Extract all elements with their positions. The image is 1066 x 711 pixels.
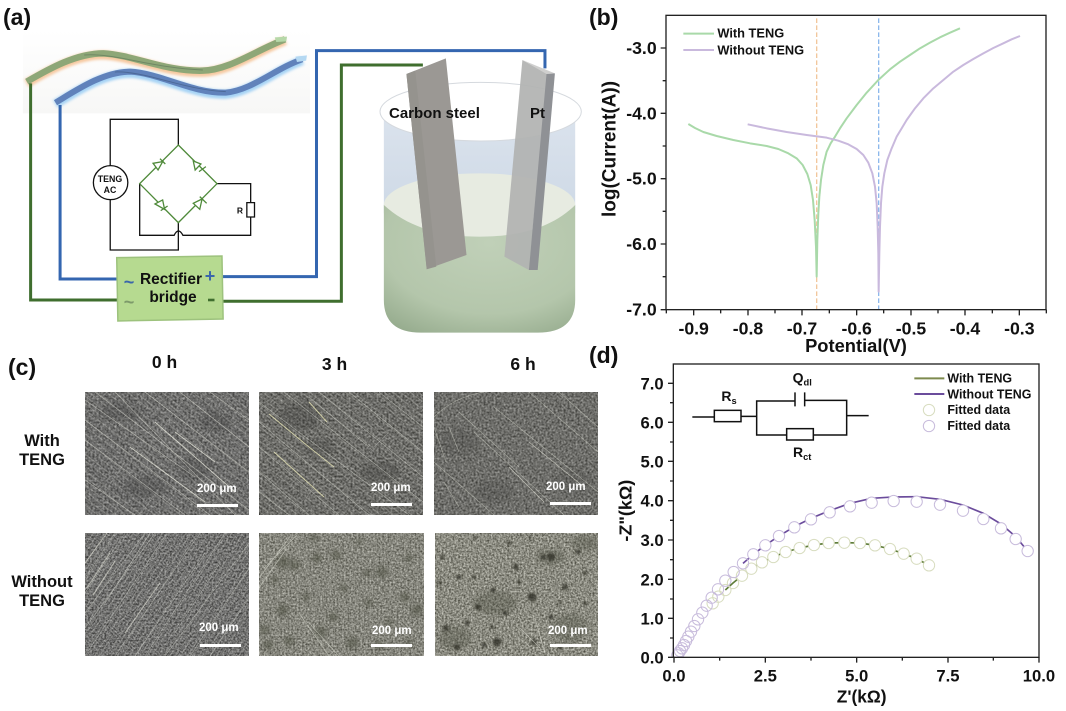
label: TENG AC: TENG <box>98 174 122 184</box>
y tick labels: 5.0 <box>641 452 664 471</box>
y tick labels <box>626 38 657 319</box>
scale bars: 200 μm <box>199 622 239 634</box>
TENG ribbons <box>23 30 310 113</box>
schematic drawing <box>23 30 581 333</box>
electrode: carbon steel <box>406 58 467 269</box>
x axis title: Z'(kΩ) <box>837 686 887 706</box>
y axis title: -Z"(kΩ) <box>616 480 636 542</box>
curve: without TENG <box>743 497 1028 563</box>
y tick labels: -4.0 <box>626 103 657 123</box>
x tick labels <box>662 667 1055 686</box>
equivalent circuit inset: ct <box>803 452 811 462</box>
label: carbon steel: Carbon steel <box>389 105 480 122</box>
scale bars: 200 μm <box>546 481 586 493</box>
column headers <box>152 352 536 374</box>
fitted circles: with TENG <box>707 537 935 609</box>
micrograph: with TENG 3 h <box>259 392 423 515</box>
x tick labels: -0.6 <box>841 318 872 338</box>
beaker <box>380 82 581 333</box>
x tick labels: 2.5 <box>754 667 777 686</box>
label: rectifier bridge <box>140 271 202 306</box>
column headers: 3 h <box>322 354 347 374</box>
y tick labels: -6.0 <box>626 234 657 254</box>
legend: Fitted data <box>947 419 1010 433</box>
legend: Without TENG <box>717 42 804 57</box>
x axis title: Potential(V) <box>805 335 907 356</box>
scale bars: 200 μm <box>371 482 411 494</box>
panel: (a) TENG circuit and beaker <box>3 4 581 333</box>
legend <box>683 26 804 57</box>
scale bars: 200 μm <box>197 483 237 495</box>
y tick labels: -3.0 <box>626 38 657 58</box>
y tick labels: 0.0 <box>641 648 664 667</box>
legend <box>914 372 1031 433</box>
rectifier bridge box <box>117 256 223 321</box>
y tick labels <box>641 374 664 667</box>
row label: with TENG <box>19 432 65 469</box>
equivalent circuit inset: s <box>731 396 737 406</box>
row label: with TENG: With <box>24 432 60 450</box>
rectifier terminals: + <box>205 266 215 286</box>
micrograph: without TENG 0 h <box>85 533 249 656</box>
electrode: Pt <box>504 60 555 270</box>
curve: without TENG <box>748 36 1020 292</box>
x tick labels: -0.3 <box>1004 318 1035 338</box>
label: TENG AC <box>98 174 122 195</box>
micrograph: with TENG 0 h <box>85 392 249 515</box>
white mask below axis <box>667 658 707 663</box>
label: TENG AC: AC <box>104 185 117 195</box>
rectifier terminals: ~ <box>124 292 134 312</box>
label: (d): (d) <box>589 342 618 368</box>
y tick labels: 4.0 <box>641 492 664 511</box>
curve: with TENG <box>725 543 929 590</box>
label: (c): (c) <box>8 354 36 380</box>
chart: Tafel plot <box>600 15 1046 356</box>
rectifier terminals: ~ <box>124 272 134 292</box>
row label: without TENG: Without <box>11 573 73 591</box>
y tick labels: -7.0 <box>626 299 657 319</box>
scale bars: 200 μm <box>372 625 412 637</box>
reference dashes <box>817 18 879 310</box>
x tick labels: -0.7 <box>787 318 817 338</box>
panel: (b) polarization curves <box>589 4 1046 356</box>
legend: With TENG <box>717 26 784 41</box>
axes <box>668 364 1039 663</box>
y axis title: log(Current(A)) <box>600 81 621 217</box>
micrograph: without TENG 6 h <box>435 533 598 656</box>
label: Pt: Pt <box>530 105 545 122</box>
scale bars <box>197 481 591 647</box>
y tick labels: 3.0 <box>641 531 664 550</box>
equivalent circuit inset <box>692 370 869 462</box>
row label: with TENG: TENG <box>19 451 65 469</box>
rectifier terminals <box>124 266 215 312</box>
label: (b): (b) <box>589 4 618 30</box>
micrograph: with TENG 6 h <box>434 392 598 515</box>
y tick labels: 6.0 <box>641 413 664 432</box>
panel: (d) Nyquist plot <box>589 342 1055 706</box>
column headers: 6 h <box>510 354 536 374</box>
label: rectifier bridge: bridge <box>149 289 197 306</box>
wires <box>31 51 545 301</box>
x tick labels: 5.0 <box>845 667 868 686</box>
label: rectifier bridge: Rectifier <box>140 271 202 288</box>
x tick labels: -0.9 <box>678 318 709 338</box>
panel: (c) micrographs <box>8 352 599 656</box>
equivalent circuit inset: R <box>721 388 731 404</box>
x tick labels: 10.0 <box>1023 667 1055 686</box>
fitted circles: without TENG <box>672 495 1033 661</box>
chart: impedance <box>616 364 1055 706</box>
bridge circuit <box>93 119 254 250</box>
x tick labels: -0.5 <box>896 318 926 338</box>
scale bars: 200 μm <box>548 625 588 637</box>
label: (a): (a) <box>3 4 31 30</box>
x tick labels: 7.5 <box>936 667 960 686</box>
y tick labels: 7.0 <box>641 374 664 393</box>
x tick labels: 0.0 <box>662 667 686 686</box>
x tick labels <box>678 318 1035 338</box>
legend: Without TENG <box>947 387 1031 401</box>
y tick labels: 1.0 <box>641 609 664 628</box>
y tick labels: -5.0 <box>626 169 657 189</box>
equivalent circuit inset: Q <box>793 370 804 386</box>
legend: Fitted data <box>947 403 1010 417</box>
x tick labels: -0.8 <box>733 318 763 338</box>
curve: with TENG <box>688 28 960 277</box>
row label: without TENG <box>11 573 73 610</box>
label: R: R <box>237 206 243 216</box>
equivalent circuit inset: R <box>793 444 803 460</box>
axes <box>661 15 1046 315</box>
y tick labels: 2.0 <box>641 570 664 589</box>
x tick labels: -0.4 <box>950 318 980 338</box>
micrograph: without TENG 3 h <box>259 533 424 656</box>
row label: without TENG: TENG <box>19 592 65 610</box>
equivalent circuit inset: dl <box>804 378 812 388</box>
legend: With TENG <box>947 372 1012 386</box>
column headers: 0 h <box>152 352 177 372</box>
